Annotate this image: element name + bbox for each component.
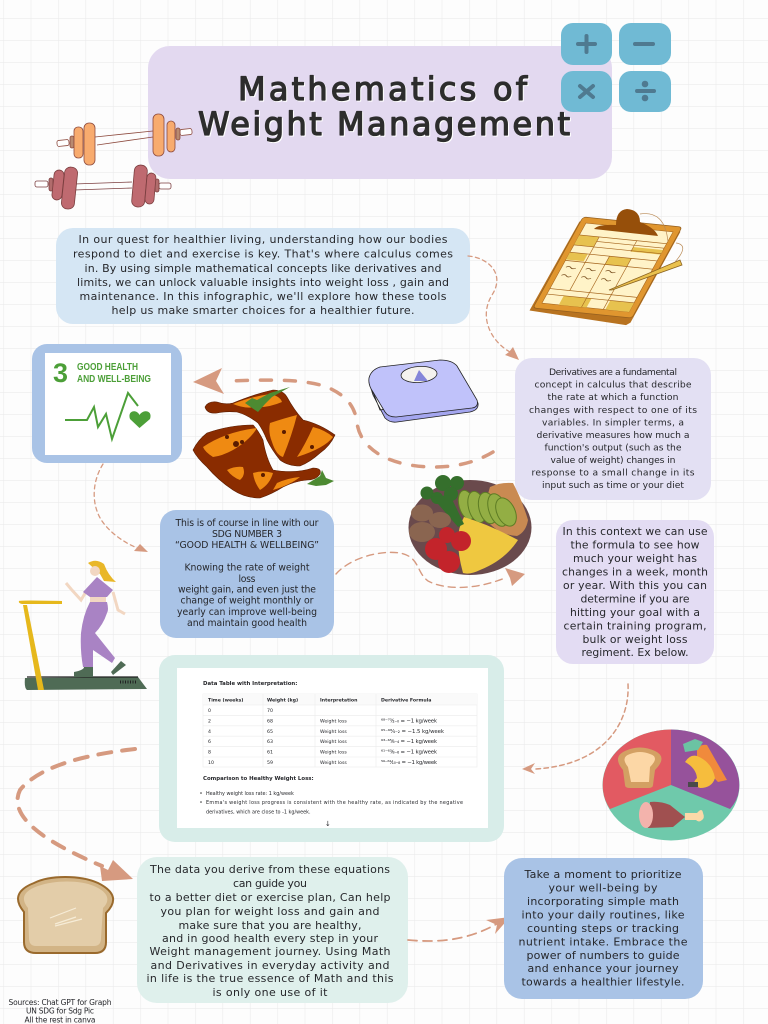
panel: conclusion [504, 858, 703, 999]
title [198, 70, 570, 143]
data table: ⁶³⁻⁶⁵⁄₆₋₄ = −1 kg/week [381, 738, 438, 745]
arrow head: to context panel [505, 568, 525, 586]
panel: SDG text: SDG NUMBER 3 [212, 529, 282, 540]
panel: data guidance text: can guide you [233, 877, 307, 890]
icon: roast chicken legs [193, 387, 335, 498]
panel: introduction: in. By using simple mathematical concepts like derivatives and [84, 262, 442, 275]
arrow: table to food pie [535, 684, 628, 769]
panel: context: determine if you are [580, 592, 690, 606]
data table: ⁵⁹⁻⁶¹⁄₁₀₋₈ = −1 kg/week [381, 759, 438, 766]
panel: SDG text: Knowing the rate of weight [184, 562, 310, 574]
data table: Weight loss [320, 729, 347, 735]
panel: context [556, 520, 714, 664]
panel: derivatives definition: derivative measures how much a [536, 430, 690, 441]
panel: context: certain training program, [564, 620, 706, 632]
comparison text: Comparison to Healthy Weight Loss: [203, 776, 314, 782]
panel: SDG text: This is of course in line with our [174, 518, 319, 529]
panel: conclusion: into your daily routines, like [522, 908, 685, 922]
icon: orange barbell [57, 114, 192, 165]
panel: data guidance text: Weight management journey. Using Math [150, 945, 391, 958]
icon: weighing scale [369, 360, 478, 422]
panel: introduction: In our quest for healthier living, understanding how our bodies [78, 233, 448, 246]
panel: data guidance text: and Derivatives in everyday activity and [150, 959, 390, 972]
panel: SDG 3 badge: GOOD HEALTH [77, 362, 138, 373]
panel: data guidance text: The data you derive from these equations [149, 863, 390, 876]
data table: Weight (kg) [267, 698, 298, 704]
panel: SDG text: and maintain good health [187, 618, 307, 629]
panel: context: bulk or weight loss [582, 633, 688, 646]
icon: math operator buttons [561, 23, 671, 112]
comparison text: ↓ [325, 820, 331, 828]
panel: derivatives definition: value of weight) changes in [550, 455, 676, 466]
table heading: Data Table with Interpretation: [203, 681, 297, 687]
panel: data guidance text [137, 857, 408, 1003]
panel: context: the formula to see how [570, 538, 700, 552]
data table [203, 694, 477, 767]
data table: 65 [267, 729, 273, 735]
title panel [148, 46, 612, 179]
icon: clipboard [527, 217, 683, 325]
arrow head: to SDG badge [193, 368, 224, 394]
panel: derivatives definition: Derivatives are a fundamental [549, 367, 677, 378]
arrow: text to plate [336, 552, 505, 587]
data table: Weight loss [320, 718, 347, 724]
arrow head: table [522, 763, 535, 774]
sources: Sources: Chat GPT for Graph [8, 998, 112, 1007]
panel: data guidance text: in life is the true essence of Math and this [146, 972, 394, 985]
panel: conclusion: power of numbers to guide [526, 949, 680, 962]
arrow head: SDG text [134, 544, 148, 552]
icon: food group pie [602, 730, 740, 840]
panel: SDG text [160, 510, 334, 638]
panel: data table [159, 655, 504, 842]
panel: derivatives definition: changes with respect to one of its [529, 405, 697, 416]
data table: Weight loss [320, 760, 347, 766]
data table: 68 [267, 718, 273, 724]
comparison text: Emma's weight loss progress is consistent with the healthy rate, as indicated by the negative [206, 800, 463, 806]
data table: Derivative Formula [381, 698, 431, 704]
sources [8, 998, 112, 1024]
data table: 4 [208, 729, 211, 735]
data table: Interpretation [320, 698, 357, 704]
title: Mathematics of [238, 70, 528, 108]
title: Weight Management [198, 105, 570, 143]
panel: derivatives definition: concept in calculus that describe [534, 380, 692, 390]
data table: 2 [208, 718, 211, 724]
data table: 61 [267, 750, 273, 756]
panel: introduction: maintenance. In this infographic, we'll explore how these tools [80, 290, 447, 303]
panel: context: much your weight has [573, 552, 697, 565]
data table: 70 [267, 708, 273, 714]
data table: Time (weeks) [208, 698, 243, 704]
panel: conclusion: incorporating simple math [527, 895, 679, 908]
panel: SDG text: yearly can improve well-being [177, 607, 317, 618]
panel: conclusion: and enhance your journey [528, 962, 679, 975]
icon: bread slice [18, 877, 113, 953]
data table: Weight loss [320, 750, 347, 756]
icon: treadmill runner [19, 561, 147, 690]
icon: breakfast plate [408, 475, 532, 575]
data table: 10 [208, 760, 214, 766]
panel: derivatives definition [515, 358, 711, 500]
icon: red barbell [35, 165, 171, 210]
arrow: big dashes to SDG badge [225, 380, 493, 467]
data table: 6 [208, 739, 211, 745]
data table: 8 [208, 750, 211, 756]
arrow: SDG badge to text [94, 464, 143, 550]
panel: SDG text: change of weight monthly or [180, 596, 314, 606]
data table: ⁶¹⁻⁶³⁄₈₋₆ = −1 kg/week [381, 748, 438, 756]
panel: SDG 3 badge: 3 [53, 358, 68, 388]
panel: context: or year. With this you can [563, 579, 707, 592]
data table: ⁶⁸⁻⁷⁰⁄₂₋₀ = −1 kg/week [381, 718, 438, 724]
panel: SDG text: “GOOD HEALTH & WELLBEING” [175, 540, 319, 551]
panel: conclusion: counting steps or tracking [527, 922, 679, 935]
comparison text: Healthy weight loss rate: 1 kg/week [206, 791, 294, 797]
panel: introduction: limits, we can unlock valuable insights into weight loss , gain and [77, 276, 449, 289]
data table: 63 [267, 739, 273, 745]
panel: conclusion: Take a moment to prioritize [524, 868, 682, 881]
icon: clipboard clip and pencil [594, 209, 683, 290]
panel: introduction: help us make smarter choices for a healthier future. [112, 304, 414, 317]
panel: conclusion: towards a healthier lifestyle. [522, 976, 684, 988]
panel: data guidance text: make sure that you are healthy, [178, 919, 362, 932]
data table: ⁶⁵⁻⁶⁸⁄₄₋₂ = −1.5 kg/week [381, 728, 445, 735]
panel: data guidance text: is only one use of it [212, 986, 328, 999]
arrow: intro to derivatives [468, 256, 510, 352]
panel: conclusion: your well-being by [548, 882, 658, 894]
sources: UN SDG for Sdg Pic [26, 1006, 94, 1016]
arrow head: data guidance [100, 860, 133, 881]
panel: SDG 3 badge: AND WELL-BEING [77, 374, 151, 385]
data table: 0 [208, 708, 211, 714]
arrow head: conclusion [486, 917, 510, 934]
panel: introduction [56, 228, 470, 324]
data table: 59 [267, 760, 273, 766]
panel: conclusion: nutrient intake. Embrace the [518, 936, 688, 948]
panel: derivatives definition: the rate at which a function [548, 392, 679, 403]
panel: data guidance text: you plan for weight loss and gain and [160, 905, 380, 918]
panel: data guidance text: to a better diet or exercise plan, Can help [150, 891, 391, 904]
panel: SDG 3 badge [32, 344, 182, 463]
comparison text [200, 776, 463, 828]
panel: context: regiment. Ex below. [582, 646, 688, 659]
comparison text: derivatives, which are close to -1 kg/week. [206, 810, 311, 816]
panel: introduction: respond to diet and exercise is key. That's where calculus comes [73, 248, 453, 260]
arrow: big dashes to data guidance [18, 749, 135, 866]
data table: Weight loss [320, 739, 347, 745]
arrow: guidance to conclusion [408, 922, 500, 941]
panel: SDG text: loss [238, 574, 256, 585]
panel: derivatives definition: response to a small change in its [532, 468, 695, 478]
panel: SDG text: weight gain, and even just the [178, 584, 316, 596]
panel: derivatives definition: variables. In simpler terms, a [542, 418, 684, 428]
panel: data guidance text: and in good health every step in your [162, 932, 378, 945]
arrow head: derivatives [505, 347, 519, 360]
panel: context: changes in a week, month [562, 566, 708, 578]
panel: derivatives definition: input such as time or your diet [542, 480, 684, 491]
panel: context: In this context we can use [562, 525, 708, 538]
panel: derivatives definition: function's output (such as the [544, 442, 682, 454]
panel: context: hitting your goal with a [570, 606, 700, 619]
